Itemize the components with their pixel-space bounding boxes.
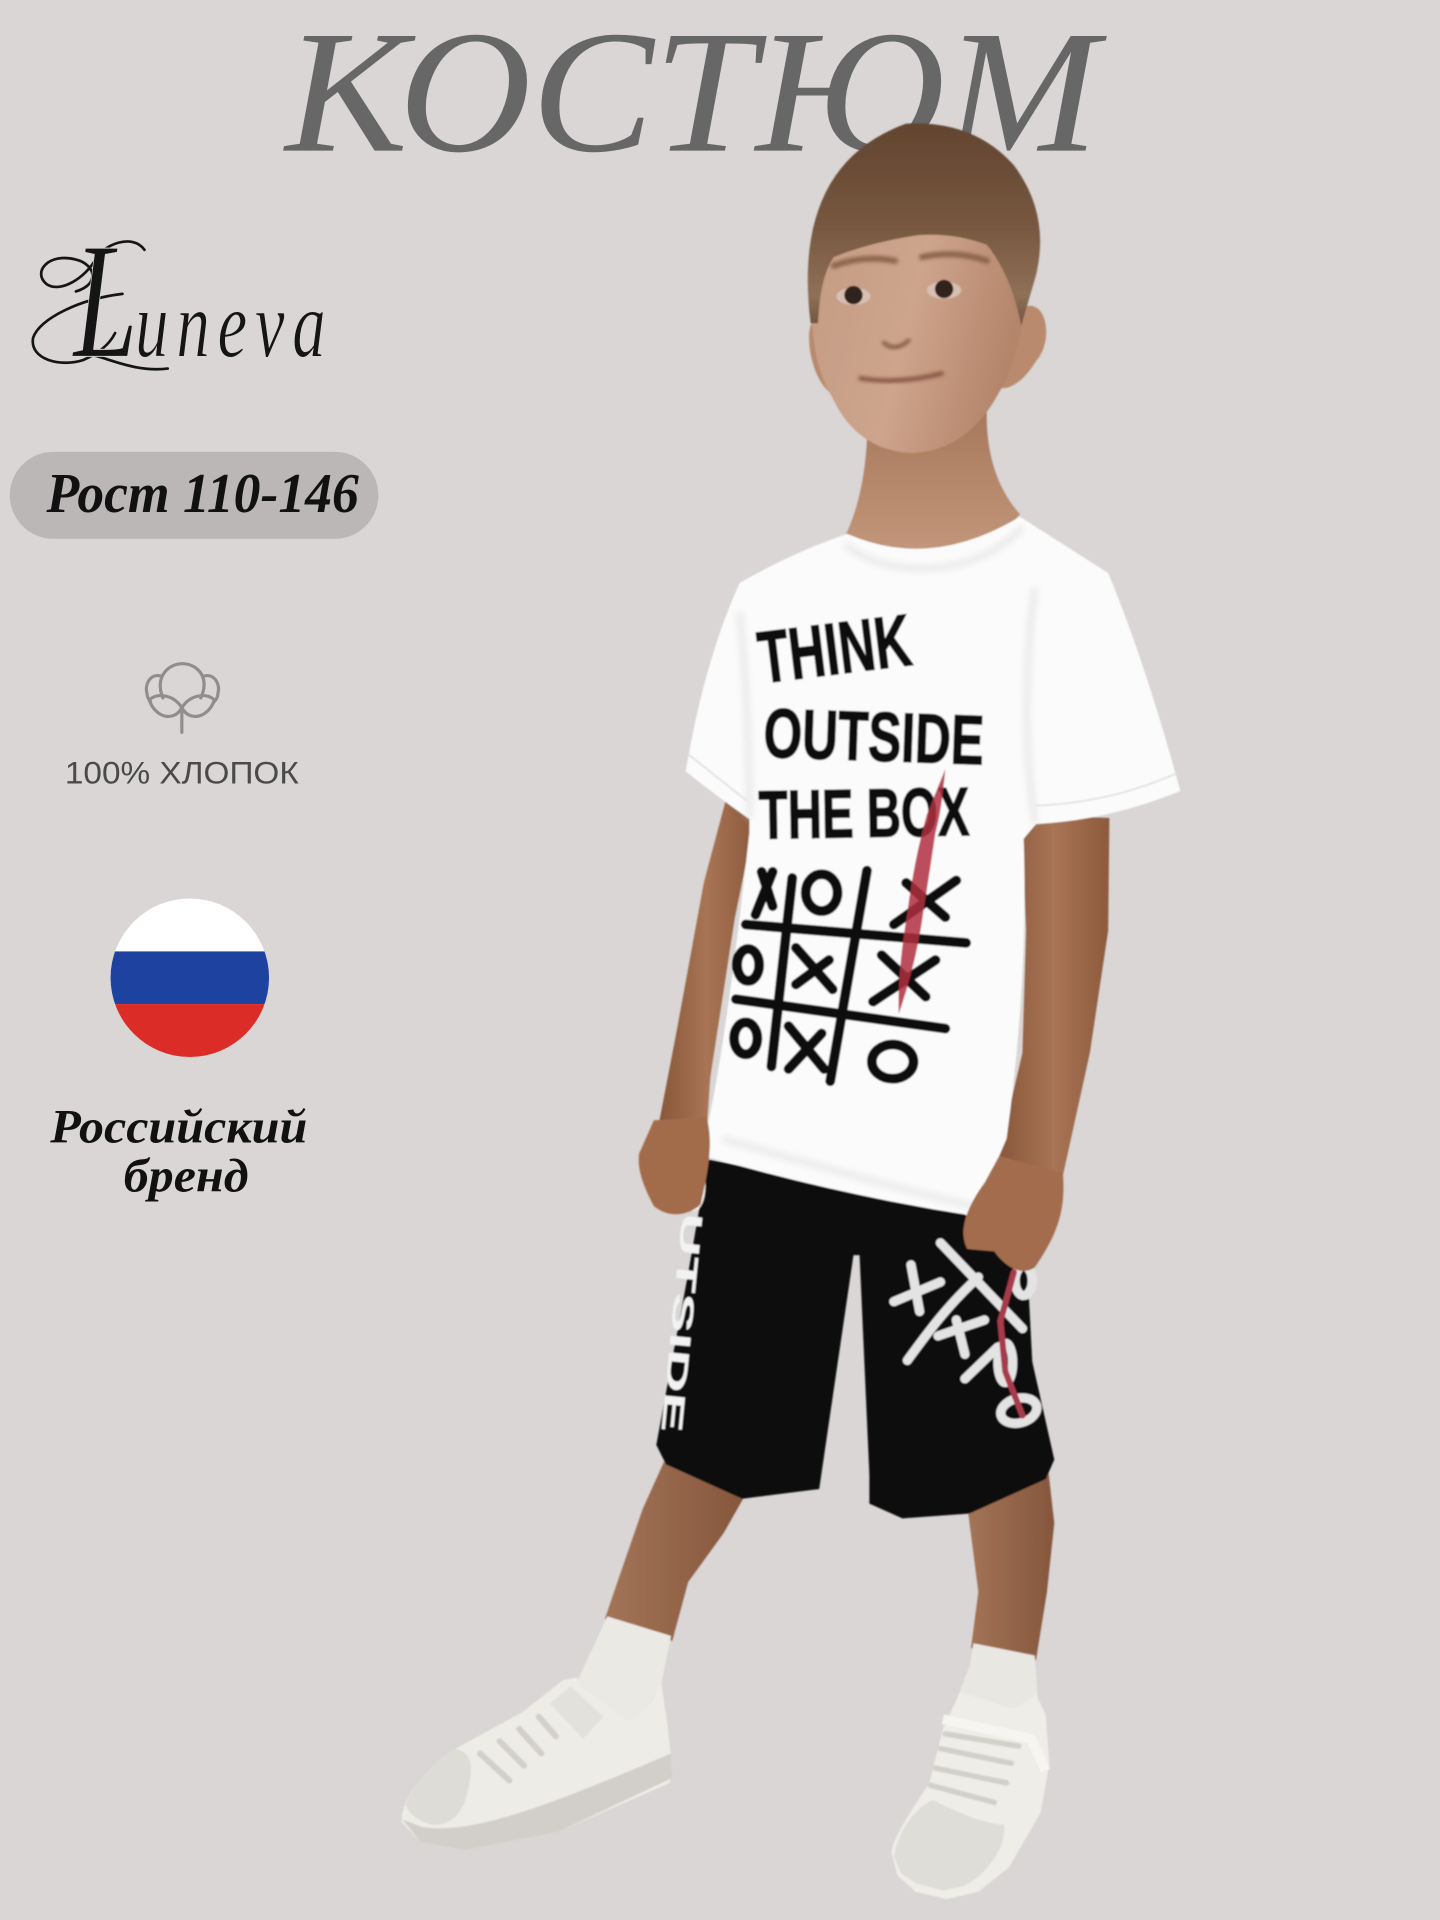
shirt body [686, 517, 1180, 1216]
brand origin text [49, 1100, 307, 1202]
logo wordmark: L [72, 209, 138, 392]
left shoe [402, 1678, 672, 1850]
print: THE BOX: THE BOX [758, 773, 970, 854]
origin line 2: бренд [124, 1149, 249, 1202]
origin line 1: Российский [49, 1100, 307, 1153]
logo flourish [33, 241, 168, 369]
material label: 100% ХЛОПОК [65, 755, 299, 791]
badge pill [10, 452, 378, 539]
shorts side lettering: OUTSIDE [654, 1165, 713, 1434]
print: OUTSIDE: OUTSIDE [762, 694, 985, 779]
shorts [654, 1160, 1054, 1518]
right sock [958, 1643, 1038, 1714]
sleeve hems [688, 754, 1176, 806]
hair [808, 123, 1040, 326]
right shoe [891, 1692, 1049, 1899]
right hand [963, 1156, 1063, 1271]
shorts body [656, 1160, 1054, 1518]
head [808, 123, 1046, 453]
icon: cotton flower [146, 664, 219, 732]
height badge [10, 452, 378, 539]
infographic canvas [10, 34, 1180, 1900]
ears [809, 306, 1046, 394]
cotton material block [65, 664, 299, 791]
neck [845, 404, 1020, 560]
shorts tic-tac-toe print [894, 1243, 1040, 1427]
nose [884, 340, 909, 347]
right leg [967, 1469, 1054, 1660]
face [811, 184, 1031, 453]
left sock [576, 1616, 671, 1727]
left arm [659, 790, 754, 1133]
print: THINK: THINK [753, 598, 916, 699]
title: КОСТЮМ [282, 0, 1107, 189]
shorts red streak [1000, 1272, 1022, 1416]
icon: russian flag [110, 898, 269, 1057]
shirt folds [722, 527, 1035, 1206]
eyes [836, 280, 961, 305]
badge text: Рост 110-146 [46, 463, 360, 525]
boy model photo [402, 123, 1180, 1899]
logo wordmark: uneva [135, 272, 333, 377]
mouth [861, 373, 942, 381]
left hand [639, 1117, 710, 1214]
brand logo [33, 209, 333, 392]
right arm [998, 814, 1109, 1176]
left leg [605, 1457, 744, 1641]
t-shirt [686, 517, 1180, 1216]
eyebrows [834, 254, 987, 266]
print: red streak [899, 769, 945, 1014]
print: tic-tac-toe grid [734, 871, 966, 1081]
